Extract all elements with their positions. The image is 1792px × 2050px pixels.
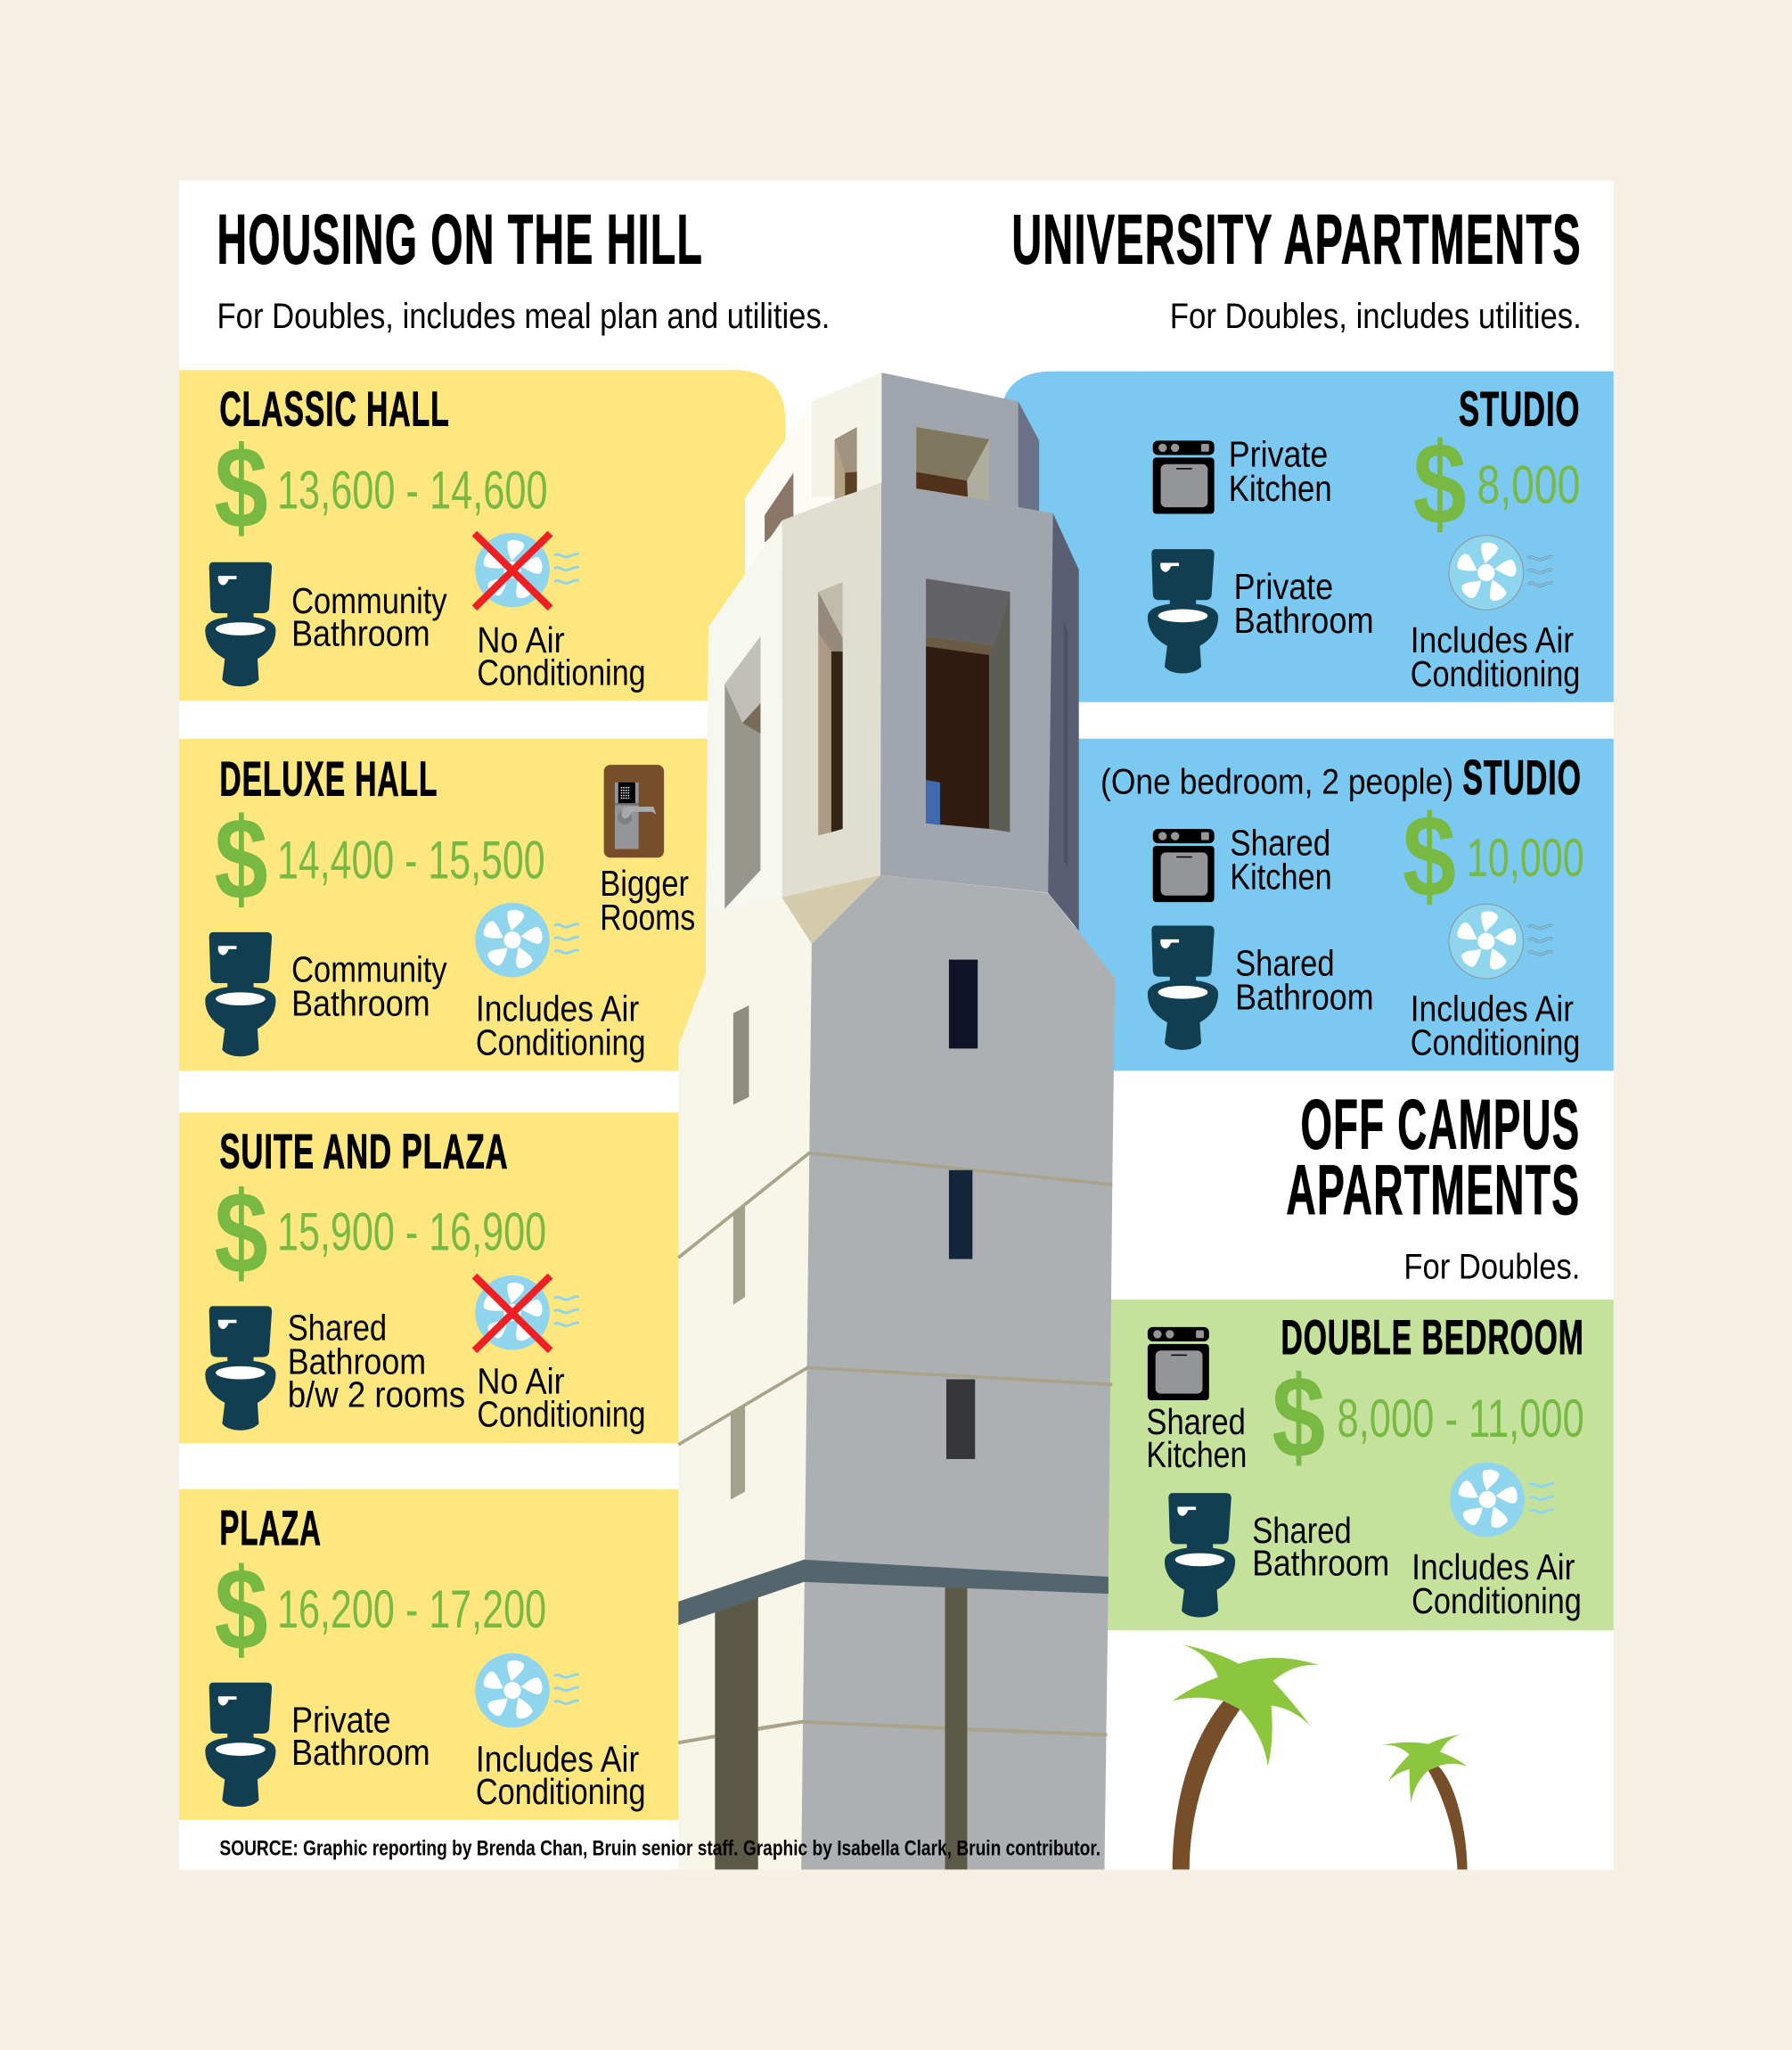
icon: dollar sign: $	[215, 1168, 268, 1298]
icon: toilet	[205, 1683, 275, 1807]
panel background: suite and plaza	[179, 1112, 683, 1443]
bathroom label	[1235, 942, 1374, 1017]
icon: fan	[1450, 1463, 1554, 1537]
air conditioning label	[1411, 619, 1580, 694]
title: housing on the hill: HOUSING ON THE HILL	[217, 200, 703, 279]
bathroom label: Bathroom	[291, 1732, 430, 1773]
heading: deluxe hall: DELUXE HALL	[219, 752, 438, 807]
kitchen label: Private	[1229, 434, 1328, 475]
air conditioning label	[476, 988, 646, 1063]
icon: fan	[1449, 904, 1553, 979]
air conditioning label: No Air	[477, 619, 565, 660]
bathroom label: Community	[291, 949, 447, 990]
bathroom label: Bathroom	[291, 613, 430, 654]
icon: dollar sign: $	[215, 1544, 268, 1674]
bathroom label	[291, 580, 447, 654]
bathroom label	[1252, 1510, 1389, 1584]
panel background: studio	[1000, 372, 1614, 702]
icon: toilet	[205, 562, 275, 686]
heading: double bedroom: DOUBLE BEDROOM	[1281, 1310, 1584, 1365]
tower: right belfry window	[926, 578, 1010, 645]
air conditioning label: Includes Air	[1412, 1546, 1575, 1587]
air conditioning label	[477, 619, 646, 693]
icon: dollar sign: $	[215, 793, 268, 923]
bathroom label	[291, 1700, 430, 1773]
price: 10,000	[1467, 828, 1584, 888]
tower: left belfry window	[724, 636, 760, 908]
icon: door lock	[604, 765, 664, 857]
panel: suite and plaza	[205, 1125, 646, 1434]
panel background: deluxe hall	[179, 739, 715, 1070]
bathroom label: Community	[291, 580, 447, 621]
panel background: double bedroom	[1106, 1300, 1614, 1630]
bathroom label: b/w 2 rooms	[288, 1374, 465, 1414]
air conditioning label: Includes Air	[476, 1739, 639, 1780]
kitchen label	[1146, 1401, 1247, 1475]
air conditioning label	[1411, 988, 1580, 1063]
panel: deluxe hall	[205, 752, 695, 1063]
bathroom label: Shared	[1252, 1510, 1352, 1551]
note: one bedroom: (One bedroom, 2 people)	[1101, 762, 1453, 801]
heading: suite and plaza: SUITE AND PLAZA	[219, 1125, 509, 1179]
title: housing on the hill	[217, 200, 830, 336]
price: 8,000	[1477, 455, 1580, 515]
panel: classic hall	[205, 381, 646, 693]
panel: one bedroom studio	[1101, 750, 1584, 1063]
air conditioning label: Conditioning	[477, 652, 646, 693]
price: 13,600 - 14,600	[277, 461, 548, 521]
kitchen label	[1229, 434, 1332, 509]
air conditioning label: Conditioning	[1411, 653, 1580, 694]
heading: plaza: PLAZA	[219, 1501, 322, 1555]
icon: dollar sign: $	[215, 422, 268, 553]
panel: studio	[1148, 381, 1580, 694]
icon: oven	[1153, 829, 1215, 902]
bathroom label	[288, 1308, 465, 1414]
title: off campus apartments: For Doubles.	[1403, 1248, 1580, 1287]
icon: oven	[1153, 440, 1215, 513]
icon: toilet	[1165, 1493, 1235, 1617]
icon: small palm tree	[1383, 1734, 1468, 1870]
icon: fan	[475, 1653, 579, 1727]
bathroom label: Bathroom	[1234, 600, 1374, 641]
air conditioning label: Conditioning	[477, 1393, 646, 1434]
tower: lower body	[678, 897, 812, 1870]
title: housing on the hill: For Doubles, includes meal plan and utilities.	[217, 297, 830, 336]
heading: classic hall: CLASSIC HALL	[219, 381, 450, 436]
panel background: one bedroom studio	[1075, 739, 1614, 1070]
title: off campus apartments	[1286, 1085, 1580, 1287]
icon: dollar sign: $	[1272, 1352, 1325, 1482]
heading: studio: STUDIO	[1462, 750, 1582, 805]
panel: plaza	[205, 1501, 646, 1812]
bathroom label: Bathroom	[288, 1341, 426, 1382]
heading: studio: STUDIO	[1459, 381, 1580, 436]
icon: dollar sign: $	[1403, 791, 1456, 922]
air conditioning label: Includes Air	[1411, 619, 1574, 660]
kitchen label: Kitchen	[1229, 468, 1332, 509]
panel background: classic hall	[179, 370, 786, 701]
icon: fan	[1449, 536, 1553, 610]
price: 16,200 - 17,200	[277, 1579, 546, 1639]
panel: double bedroom	[1146, 1310, 1584, 1621]
title: university apartments: For Doubles, includes utilities.	[1170, 297, 1582, 336]
source credit: SOURCE: Graphic reporting by Brenda Chan, Bruin senior staff. Graphic by Isabella Clark, Bruin contributor.	[219, 1836, 1101, 1860]
icon: crossed out fan	[474, 1275, 579, 1350]
icon: dollar sign: $	[1413, 418, 1467, 548]
bigger rooms label	[600, 863, 695, 938]
air conditioning label: Conditioning	[1411, 1022, 1580, 1063]
icon: crossed out fan	[474, 533, 579, 608]
icon: toilet	[1148, 549, 1218, 673]
tower illustration	[678, 373, 1115, 1870]
bathroom label: Private	[1234, 566, 1333, 607]
air conditioning label: Conditioning	[1412, 1580, 1582, 1621]
tower: top section	[745, 401, 837, 572]
air conditioning label	[477, 1361, 646, 1434]
white card	[179, 180, 1614, 1870]
bathroom label: Bathroom	[1252, 1543, 1389, 1584]
price: 8,000 - 11,000	[1338, 1389, 1584, 1448]
kitchen label: Shared	[1146, 1401, 1246, 1442]
bathroom label: Bathroom	[291, 983, 430, 1024]
bigger rooms label: Rooms	[600, 897, 695, 938]
air conditioning label	[476, 1739, 646, 1812]
bathroom label: Shared	[288, 1308, 387, 1349]
air conditioning label: No Air	[477, 1361, 565, 1402]
bathroom label: Shared	[1235, 942, 1335, 983]
kitchen label	[1230, 822, 1332, 897]
title: off campus apartments: OFF CAMPUS	[1300, 1085, 1580, 1164]
kitchen label: Kitchen	[1230, 856, 1332, 897]
bathroom label: Bathroom	[1235, 976, 1374, 1017]
icon: toilet	[205, 1306, 275, 1431]
price: 14,400 - 15,500	[277, 831, 545, 890]
tower: centre belfry window	[818, 582, 843, 638]
bathroom label	[291, 949, 447, 1024]
air conditioning label: Includes Air	[476, 988, 639, 1029]
tower: main belfry	[706, 521, 782, 915]
icon: toilet	[1148, 926, 1218, 1050]
kitchen label: Kitchen	[1146, 1434, 1247, 1475]
panel background: plaza	[179, 1489, 683, 1820]
price: 15,900 - 16,900	[277, 1201, 546, 1261]
air conditioning label: Conditioning	[476, 1022, 646, 1063]
icon: large palm tree	[1173, 1644, 1319, 1870]
bathroom label	[1234, 566, 1374, 641]
title: university apartments	[1011, 200, 1582, 336]
air conditioning label	[1412, 1546, 1582, 1621]
bigger rooms label: Bigger	[600, 863, 689, 904]
air conditioning label: Conditioning	[476, 1771, 646, 1812]
icon: fan	[475, 903, 579, 977]
bathroom label: Private	[291, 1700, 391, 1741]
title: off campus apartments: APARTMENTS	[1286, 1150, 1580, 1229]
air conditioning label: Includes Air	[1411, 988, 1574, 1029]
icon: oven	[1148, 1327, 1209, 1400]
kitchen label: Shared	[1230, 822, 1330, 863]
icon: toilet	[205, 932, 275, 1056]
